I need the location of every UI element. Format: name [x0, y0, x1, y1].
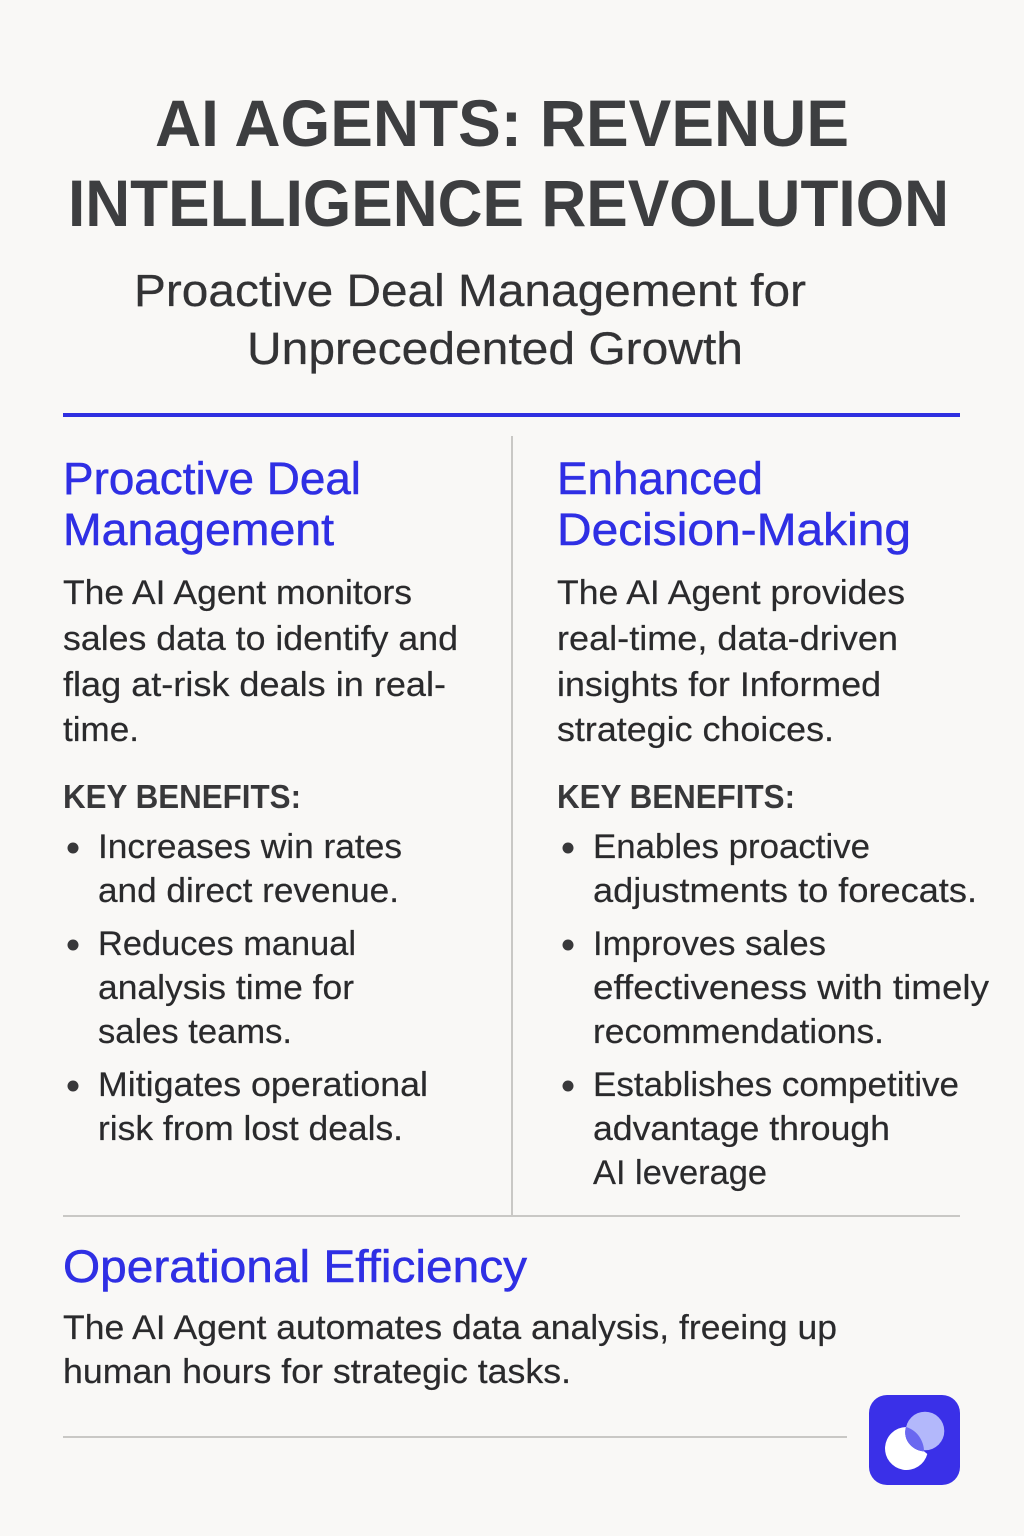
subtitle: Proactive Deal Management for: [134, 265, 806, 316]
text block: decision-making description: strategic choices.: [557, 711, 834, 749]
title: INTELLIGENCE REVOLUTION: [68, 167, 949, 240]
title: AI AGENTS: REVENUE: [155, 87, 849, 160]
bullet list: decision-making benefits: recommendations.: [593, 1013, 884, 1051]
bullet list: proactive deal benefits: Increases win rates: [98, 828, 402, 866]
heading: enhanced decision-making: Decision-Making: [557, 504, 911, 555]
bullet list: decision-making benefits: advantage through: [593, 1110, 890, 1148]
text block: operational efficiency description: human hours for strategic tasks.: [63, 1353, 571, 1391]
text block: proactive deal description: The AI Agent monitors: [63, 574, 412, 612]
bullet list: decision-making benefits: Enables proactive: [593, 828, 870, 866]
bullet list: proactive deal benefits: sales teams.: [98, 1013, 292, 1051]
key benefits label: KEY BENEFITS:: [63, 778, 301, 815]
heading: proactive deal management: [63, 453, 361, 555]
bullet list: proactive deal benefits: risk from lost deals.: [98, 1110, 403, 1148]
heading: operational efficiency: Operational Efficiency: [63, 1241, 528, 1292]
bullet list: decision-making benefits: effectiveness with timely: [593, 969, 990, 1007]
bullet list: decision-making benefits: adjustments to forecats.: [593, 872, 977, 910]
heading: enhanced decision-making: Enhanced: [557, 453, 763, 504]
icon: overlapping circles logo: [869, 1395, 960, 1485]
bullet list: proactive deal benefits: analysis time for: [98, 969, 354, 1007]
bullet list: proactive deal benefits: and direct revenue.: [98, 872, 399, 910]
text block: proactive deal description: sales data to identify and: [63, 620, 458, 658]
text block: decision-making description: real-time, data-driven: [557, 620, 898, 658]
bullet list: decision-making benefits: [562, 828, 990, 1192]
subtitle: Unprecedented Growth: [247, 323, 743, 374]
heading: proactive deal management: Management: [63, 504, 335, 555]
title: [68, 87, 949, 240]
bullet list: decision-making benefits: Improves sales: [593, 925, 826, 963]
panel: operational efficiency: [63, 1241, 837, 1391]
bullet list: proactive deal benefits: [68, 828, 428, 1148]
heading: enhanced decision-making: [557, 453, 911, 555]
panel: enhanced decision-making: [557, 453, 990, 1192]
bullet list: proactive deal benefits: Reduces manual: [98, 925, 356, 963]
text block: decision-making description: [557, 574, 905, 749]
text block: operational efficiency description: [63, 1309, 837, 1391]
text block: operational efficiency description: The AI Agent automates data analysis, freeing up: [63, 1309, 837, 1347]
text block: decision-making description: insights for Informed: [557, 666, 881, 704]
bullet list: decision-making benefits: Establishes competitive: [593, 1066, 959, 1104]
heading: proactive deal management: Proactive Deal: [63, 453, 361, 504]
text block: proactive deal description: flag at-risk deals in real-: [63, 666, 446, 704]
subtitle: [134, 265, 806, 374]
text block: proactive deal description: [63, 574, 458, 749]
bullet list: decision-making benefits: AI leverage: [593, 1154, 767, 1192]
key benefits label: KEY BENEFITS:: [557, 778, 795, 815]
panel: proactive deal management: [63, 453, 458, 1148]
text block: proactive deal description: time.: [63, 711, 139, 749]
text block: decision-making description: The AI Agent provides: [557, 574, 905, 612]
bullet list: proactive deal benefits: Mitigates operational: [98, 1066, 428, 1104]
